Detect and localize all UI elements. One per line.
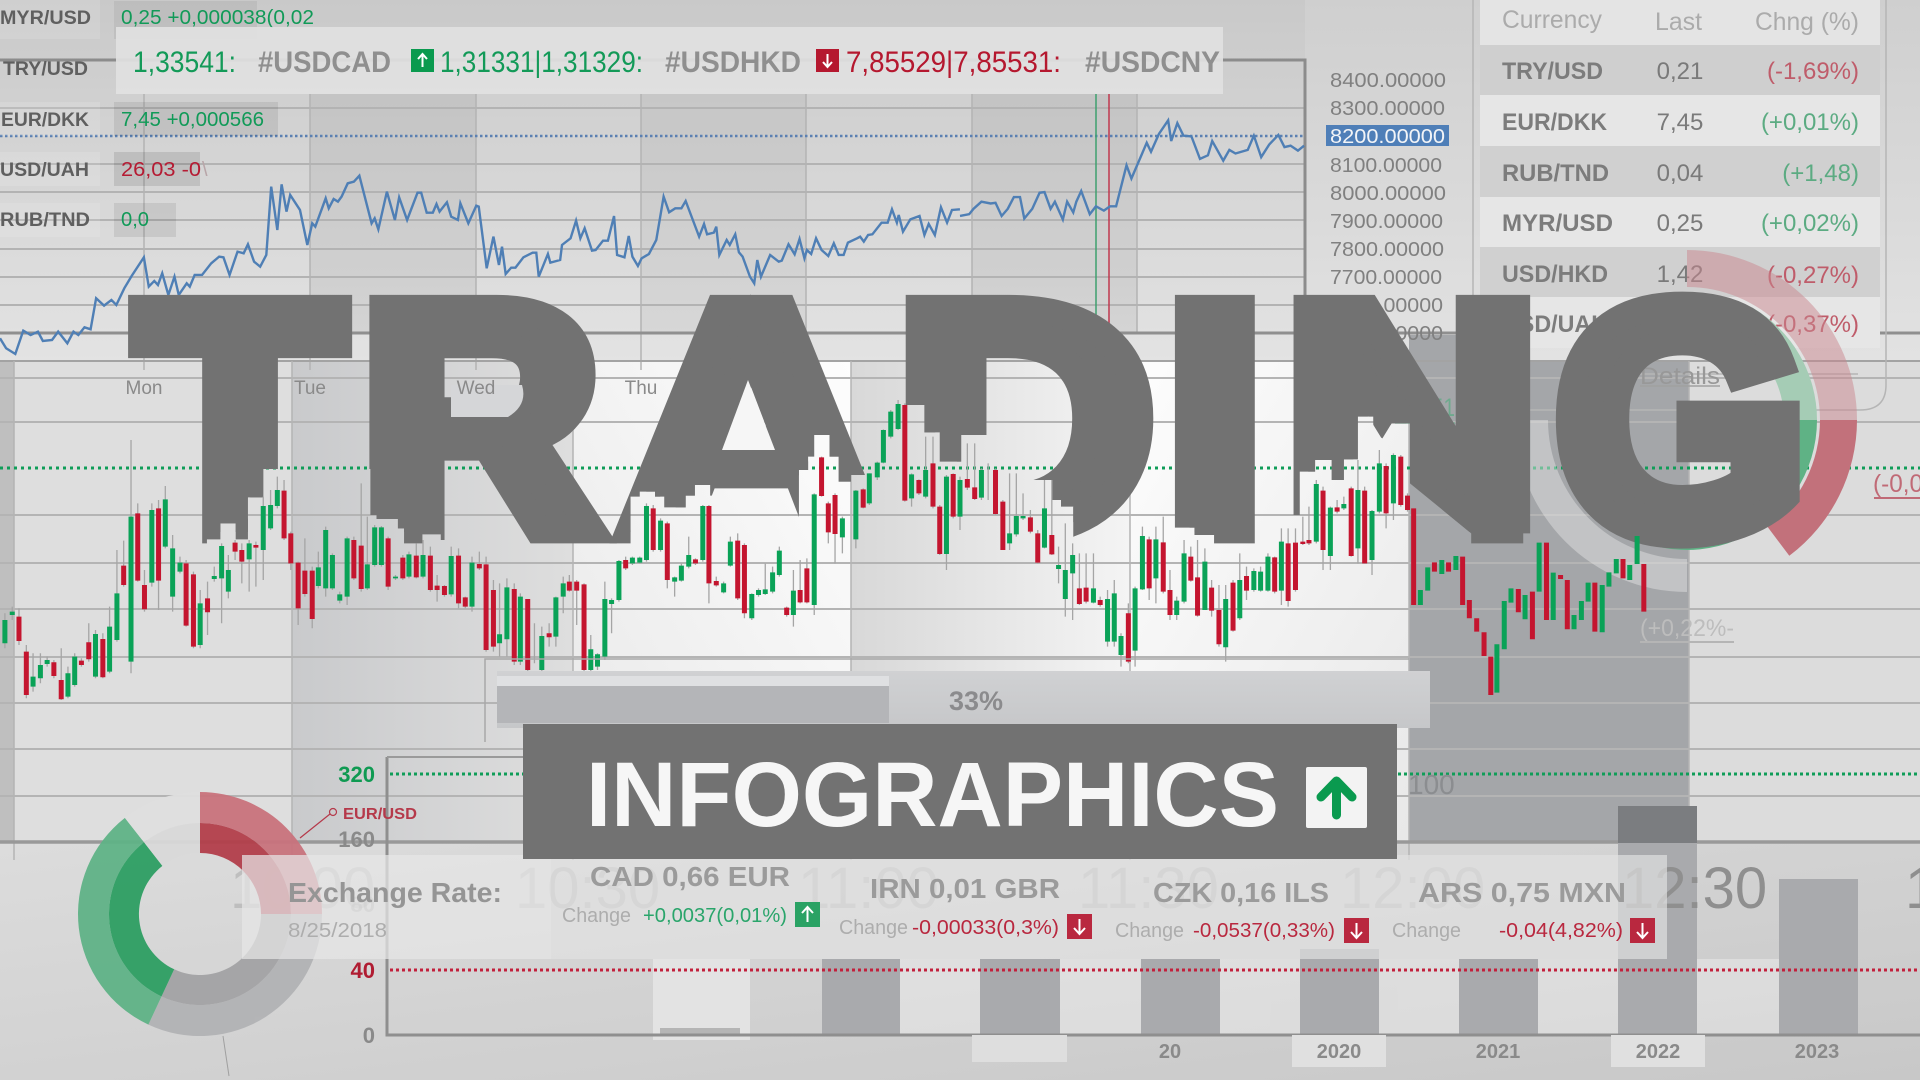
bar chart year labels: 2022 — [1636, 1041, 1680, 1063]
bar chart year labels: 20 — [1159, 1041, 1181, 1063]
pair: IRN GBR: IRN 0,01 GBR — [870, 873, 1060, 904]
table rows: 7,45 — [1657, 109, 1703, 136]
bar chart y axis: 80 — [351, 892, 375, 917]
time axis — [230, 856, 1920, 921]
weekday axis labels — [126, 378, 657, 399]
price axis: 7900.00000 — [1330, 211, 1443, 233]
currency list: top left: TRY/USD — [3, 59, 88, 80]
ticker bar — [116, 27, 1223, 94]
exchange rate title: 8/25/2018 — [288, 920, 387, 942]
pair: IRN GBR: -0,00033(0,3%) — [912, 917, 1059, 939]
title: TRADING: N — [1285, 238, 1539, 601]
R counter with weekday label — [451, 378, 523, 417]
icon: ticker up arrow — [411, 49, 434, 72]
title: TRADING: A — [621, 238, 882, 601]
pair: ARS MXN — [1392, 877, 1655, 943]
progress bar — [485, 659, 1430, 742]
ticker bar: #USDCNY — [1085, 46, 1220, 79]
pair: CAD EUR: CAD 0,66 EUR — [590, 861, 790, 892]
red candles — [19, 405, 1644, 699]
line chart grid — [0, 60, 1920, 370]
currency list: top left: \ — [202, 159, 208, 181]
time axis: 11:00 — [798, 856, 939, 921]
currency list: top left: USD/UAH — [0, 160, 89, 181]
bar chart y axis: 320 — [338, 762, 375, 787]
table rows: TRY/USD — [1502, 58, 1603, 85]
time axis: 12:30 — [1622, 856, 1767, 921]
title: TRADING: D — [897, 239, 1153, 602]
currency list: top left — [0, 0, 314, 237]
bars — [822, 806, 1858, 1035]
currency list: top left: 7,45 +0,000566 — [121, 109, 264, 131]
pair: IRN GBR: Change — [839, 917, 908, 939]
bar chart y axis: 40 — [351, 958, 375, 983]
table rows: USD/UAH — [1502, 311, 1608, 338]
pair: CAD EUR — [562, 861, 820, 927]
currency list: top left: RUB/TND — [0, 210, 90, 231]
title: TRADING: G — [1556, 238, 1806, 601]
faint percentage callouts — [1395, 394, 1920, 642]
price axis: 8200.00000 — [1330, 126, 1445, 148]
table header: Currency — [1502, 6, 1602, 34]
title: TRADING: R — [361, 239, 600, 601]
donut callout: EUR/USD: EUR/USD — [343, 806, 417, 823]
panel: currency table — [1473, 0, 1886, 410]
pair: ARS MXN: ARS 0,75 MXN — [1418, 877, 1626, 908]
table rows: USD/HKD — [1502, 261, 1608, 288]
ticker bar: #USDHKD — [665, 46, 801, 79]
title: TRADING: T — [138, 238, 342, 601]
table rows: RUB/TND — [1502, 160, 1609, 187]
bar chart — [338, 757, 1920, 1067]
time axis: 11:30 — [1078, 856, 1219, 921]
time axis: 10:30 — [515, 856, 660, 921]
bar chart year labels — [972, 1035, 1839, 1067]
title: TRADING — [128, 292, 1800, 549]
ticker bar: 7,85529|7,85531: — [846, 46, 1061, 79]
table rows: 0,21 — [1657, 58, 1703, 85]
pair: CZK ILS: Change — [1115, 920, 1184, 942]
progress bar: 33% — [949, 686, 1003, 716]
bar chart year labels: 2020 — [1317, 1041, 1361, 1063]
ticker bar: 1,31331|1,31329: — [440, 46, 643, 79]
bar halos — [900, 959, 1779, 1035]
price axis: 8100.00000 — [1330, 155, 1442, 177]
banner: INFOGRAPHICS — [523, 724, 1397, 859]
price axis: 7800.00000 — [1330, 239, 1444, 261]
bar chart: 100 — [1408, 769, 1455, 800]
bar chart year labels: 2023 — [1795, 1041, 1839, 1063]
pair: ARS MXN: -0,04(4,82%) — [1499, 920, 1623, 942]
candle wicks — [5, 400, 1420, 700]
table rows — [1502, 58, 1859, 338]
details link: Details — [1640, 363, 1720, 390]
pair: ARS MXN: Change — [1392, 920, 1461, 942]
table rows: 0,04 — [1657, 160, 1703, 187]
currency list: top left: 26,03 -0 — [121, 159, 201, 181]
weekday axis labels: Thu — [625, 378, 657, 399]
pair: CZK ILS: CZK 0,16 ILS — [1153, 877, 1329, 908]
pair: CAD EUR: +0,0037(0,01%) — [643, 905, 787, 927]
banner: INFOGRAPHICS: INFOGRAPHICS — [586, 744, 1279, 846]
title: TRADING: I — [1166, 237, 1264, 601]
table rows: MYR/USD — [1502, 210, 1613, 237]
pair: CZK ILS: -0,0537(0,33%) — [1193, 920, 1335, 942]
exchange rate title — [288, 877, 502, 942]
table rows: (-0,27%) — [1767, 262, 1859, 289]
candlestick chart — [5, 400, 1644, 700]
price axis: 8300.00000 — [1330, 98, 1445, 120]
bar chart y axis: 160 — [338, 827, 375, 852]
green candles — [5, 404, 1637, 697]
currency list: top left: 0,0 — [121, 209, 149, 231]
price axis: 8000.00000 — [1330, 183, 1446, 205]
ticker bar: #USDCAD — [258, 46, 391, 79]
donut chart: left — [78, 792, 322, 1036]
price axis: 7700.00000 — [1330, 267, 1442, 289]
table header: Chng (%) — [1755, 8, 1859, 36]
faint percentage callouts: (+0,51 — [1395, 394, 1455, 422]
weekday axis labels: Tue — [294, 378, 326, 399]
price axis: 7600.00000 — [1330, 295, 1443, 317]
table rows: (-0,37%) — [1767, 311, 1859, 338]
table rows: 0,25 — [1657, 210, 1703, 237]
icon: ticker down arrow — [816, 49, 839, 72]
pair: CZK ILS — [1115, 877, 1369, 943]
A counter highlight — [722, 380, 775, 450]
time axis: 10:00 — [230, 856, 375, 921]
table rows: EUR/DKK — [1502, 109, 1608, 136]
donut callout: EUR/USD — [223, 806, 417, 1076]
pair: CAD EUR: Change — [562, 905, 631, 927]
table rows: (+0,01%) — [1761, 109, 1859, 136]
time axis: 12:00 — [1340, 856, 1485, 921]
price axis: 7500.00000 — [1330, 323, 1443, 345]
pair: IRN GBR — [839, 873, 1092, 939]
weekday axis labels: Mon — [126, 378, 162, 399]
currency list: top left: EUR/DKK — [1, 110, 89, 131]
exchange rate strip — [242, 855, 1667, 959]
bar chart y axis — [338, 762, 375, 1048]
bar chart y axis: 0 — [363, 1023, 375, 1048]
icon: green up arrow — [1306, 767, 1367, 828]
line chart: price series — [0, 120, 1304, 354]
currency list: top left: 0,25 +0,000038(0,02 — [121, 7, 314, 29]
ticker bar: 1,33541: — [133, 46, 236, 79]
table header: Last — [1655, 8, 1702, 36]
R counter with weekday label: Wed — [457, 378, 495, 399]
exchange rate title: Exchange Rate: — [288, 877, 502, 908]
table rows: (+1,48) — [1782, 160, 1859, 187]
faint percentage callouts: (+0,22%- — [1640, 615, 1734, 642]
gauge: right donut — [1515, 250, 1857, 592]
table rows: 1,42 — [1657, 261, 1703, 288]
price axis — [1326, 70, 1449, 345]
table rows: (-1,69%) — [1767, 58, 1859, 85]
currency list: top left: MYR/USD — [0, 8, 91, 29]
price axis: 8400.00000 — [1330, 70, 1446, 92]
bar chart year labels: 2021 — [1476, 1041, 1520, 1063]
table header — [1502, 6, 1859, 36]
table rows: (+0,02%) — [1761, 210, 1859, 237]
candlestick grid — [0, 361, 1920, 860]
